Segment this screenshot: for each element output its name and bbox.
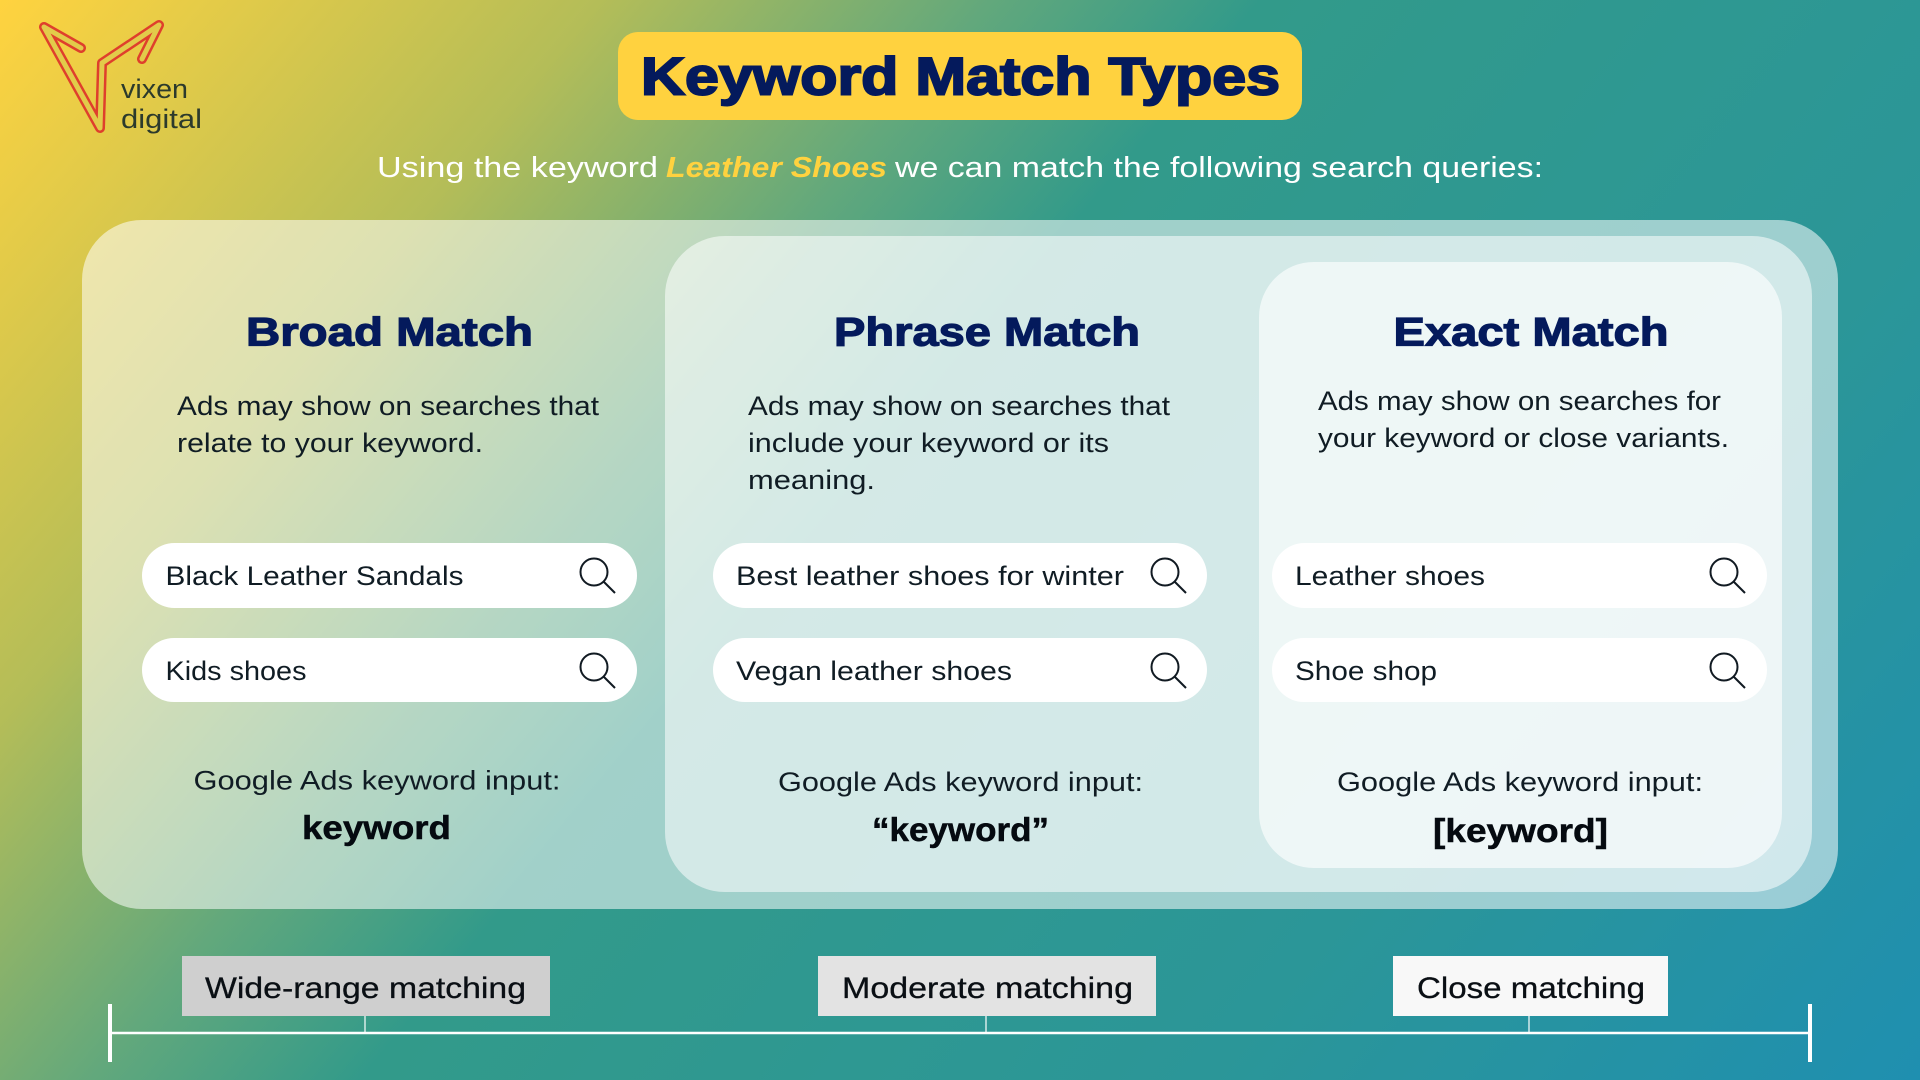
exact match description — [1318, 386, 1729, 453]
icon: logo arrow V — [44, 25, 159, 128]
panel: phrase match — [665, 236, 1812, 892]
broad match content — [142, 310, 637, 846]
subtitle: we can match the following search queries: — [894, 152, 1543, 184]
search bar: Kids shoes: Kids shoes — [166, 656, 306, 686]
search bar: Leather shoes: Leather shoes — [1295, 561, 1485, 591]
matching scale — [110, 956, 1810, 1062]
search bar: Best leather shoes for winter: Best leather shoes for winter — [736, 561, 1124, 591]
google ads input: keyword: Google Ads keyword input: — [194, 766, 560, 796]
label: close matching — [1393, 956, 1668, 1016]
title: Keyword Match Types — [641, 48, 1280, 106]
heading: exact match: Exact Match — [1394, 310, 1668, 354]
label: wide-range matching: Wide-range matching — [205, 972, 526, 1005]
search bar: Leather shoes — [1272, 543, 1767, 608]
exact match description: Ads may show on searches for — [1318, 386, 1721, 416]
panel: broad match — [82, 220, 1838, 909]
phrase match description: include your keyword or its — [748, 428, 1109, 458]
search bar: Shoe shop: Shoe shop — [1295, 656, 1437, 686]
phrase match description: meaning. — [748, 465, 875, 495]
google ads input: [keyword] — [1337, 767, 1703, 849]
google ads input: [keyword]: Google Ads keyword input: — [1337, 767, 1703, 797]
broad match description: relate to your keyword. — [177, 428, 483, 458]
label: wide-range matching — [182, 956, 550, 1016]
logo wordmark: digital — [121, 104, 202, 134]
heading: phrase match: Phrase Match — [834, 310, 1140, 354]
label: moderate matching: Moderate matching — [842, 972, 1133, 1005]
search bar: Kids shoes — [142, 638, 637, 702]
search bar: Vegan leather shoes: Vegan leather shoes — [736, 656, 1012, 686]
search bar: Best leather shoes for winter — [713, 543, 1207, 608]
search bar: Black Leather Sandals — [142, 543, 637, 608]
label: moderate matching — [818, 956, 1156, 1016]
broad match description: Ads may show on searches that — [177, 391, 600, 421]
subtitle: Using the keyword — [377, 152, 658, 184]
google ads input: keyword — [194, 766, 560, 846]
phrase match content — [713, 310, 1207, 848]
subtitle — [377, 152, 1543, 184]
subtitle: Leather Shoes — [666, 152, 887, 184]
logo: vixen digital — [44, 25, 202, 134]
search bar: Black Leather Sandals: Black Leather Sandals — [166, 561, 464, 591]
google ads input: [keyword]: [keyword] — [1433, 812, 1608, 849]
google ads input: "keyword": Google Ads keyword input: — [778, 767, 1143, 797]
panel: exact match — [1259, 262, 1782, 868]
logo wordmark: vixen — [121, 74, 188, 104]
label: close matching: Close matching — [1417, 972, 1645, 1005]
logo wordmark — [121, 74, 202, 134]
phrase match description — [748, 391, 1171, 495]
exact match content — [1272, 310, 1767, 849]
exact match description: your keyword or close variants. — [1318, 423, 1729, 453]
google ads input: "keyword": “keyword” — [872, 811, 1049, 848]
scale axis — [110, 1004, 1810, 1062]
title — [618, 32, 1302, 120]
google ads input: "keyword" — [778, 767, 1143, 848]
broad match description — [177, 391, 600, 458]
google ads input: keyword: keyword — [302, 809, 451, 846]
search bar: Shoe shop — [1272, 638, 1767, 702]
phrase match description: Ads may show on searches that — [748, 391, 1171, 421]
search bar: Vegan leather shoes — [713, 638, 1207, 702]
heading: broad match: Broad Match — [246, 310, 533, 354]
